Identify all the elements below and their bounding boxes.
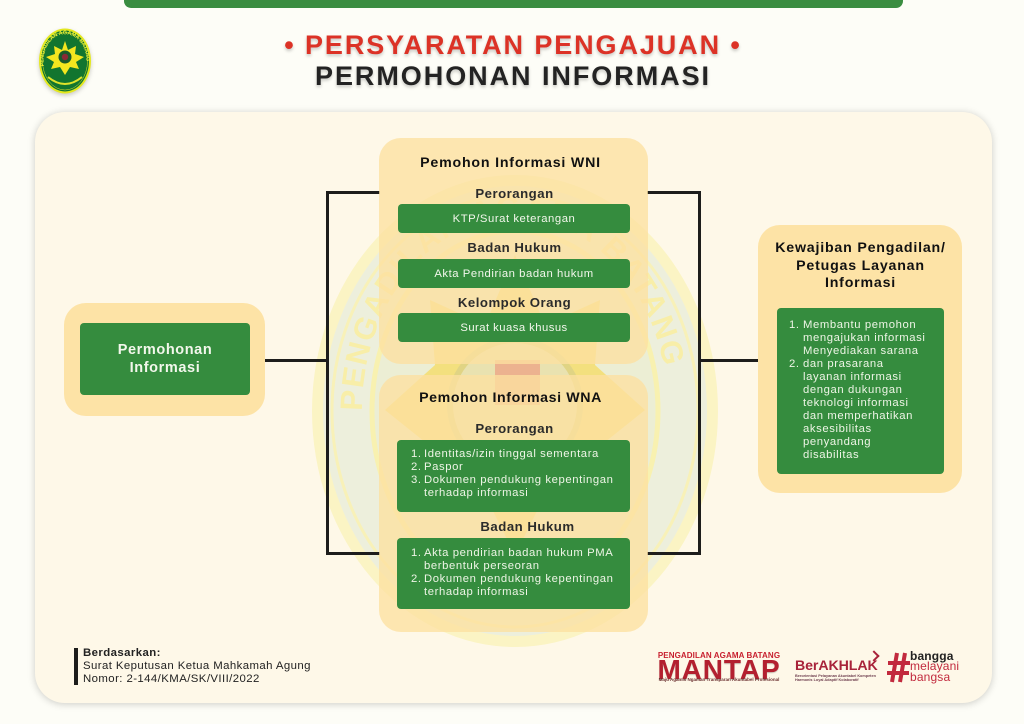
list box: 2. [789, 358, 800, 370]
logo: BerAKHLAK: Harmonis Loyal Adaptif Kolaboratif [795, 678, 859, 682]
list box Badan Hukum: terhadap informasi [424, 586, 528, 598]
green box with label: Informasi [130, 360, 200, 376]
label Perorangan: Perorangan [475, 186, 554, 201]
list box Perorangan [397, 440, 630, 512]
logo: MANTAP: MANTAP [657, 654, 781, 685]
panel: Kewajiban Pengadilan [758, 225, 962, 493]
panel: Permohonan Informasi [64, 303, 265, 416]
box KTP: KTP/Surat keterangan [453, 213, 575, 225]
label Perorangan: Perorangan [475, 421, 554, 436]
slogan text [910, 649, 959, 684]
logo: BerAKHLAK [795, 650, 880, 682]
legal basis note: Surat Keputusan Ketua Mahkamah Agung [83, 660, 311, 672]
label Badan Hukum: Badan Hukum [467, 240, 562, 255]
list box Perorangan: Dokumen pendukung kepentingan [424, 474, 614, 486]
title line 2: PERMOHONAN INFORMASI [315, 61, 711, 91]
slogan text: melayani [910, 659, 959, 673]
heading: Informasi [825, 275, 896, 291]
list box Badan Hukum [397, 538, 630, 609]
watermark emblem [312, 194, 718, 647]
title line 1: • PERSYARATAN PENGAJUAN • [284, 30, 742, 60]
list box Perorangan: Paspor [424, 461, 463, 473]
legal basis note: Berdasarkan: [83, 647, 161, 659]
list box: penyandang [803, 436, 871, 448]
logo: MANTAP: PENGADILAN AGAMA BATANG [658, 651, 780, 660]
list box: disabilitas [803, 449, 859, 461]
panel: Pemohon Informasi WNI [379, 138, 648, 364]
list box: aksesibilitas [803, 423, 872, 435]
list box Perorangan: 2. [411, 461, 422, 473]
logo: BerAKHLAK: Berorientasi Pelayanan Akuntabel Kompeten [795, 674, 876, 678]
main panel [35, 112, 992, 703]
list box: dan prasarana [803, 358, 884, 370]
panel content: WNA [397, 390, 630, 609]
heading [775, 240, 946, 291]
list box: teknologi informasi [803, 397, 909, 409]
legal basis note: Nomor: 2-144/KMA/SK/VIII/2022 [83, 673, 260, 685]
list box: Menyediakan sarana [803, 345, 919, 357]
green box with label [80, 323, 250, 395]
logo: bangga melayani bangsa [887, 649, 959, 684]
panel content: WNI [398, 155, 630, 342]
list box Perorangan: Identitas/izin tinggal sementara [424, 448, 599, 460]
slogan text: bangga [910, 649, 954, 663]
slogan text: bangsa [910, 670, 950, 684]
green box with label: Permohonan [118, 342, 212, 358]
box Akta: Akta Pendirian badan hukum [434, 268, 594, 280]
list box Perorangan: 3. [411, 474, 422, 486]
label Kelompok Orang: Kelompok Orang [458, 295, 571, 310]
list box: layanan informasi [803, 371, 902, 383]
box Akta [398, 259, 630, 288]
legal basis note [74, 647, 311, 685]
list box Badan Hukum: Akta pendirian badan hukum PMA [424, 547, 613, 559]
heading: Kewajiban Pengadilan/ [775, 240, 946, 256]
list box: dengan dukungan [803, 384, 902, 396]
logo: court emblem: PENGADILAN AGAMA BATANG [40, 30, 90, 66]
logo: MANTAP: Maju Agamis Ngaman Transparan Akuntabel Profesional [659, 677, 779, 682]
heading: Petugas Layanan [796, 258, 925, 274]
list box: Membantu pemohon [803, 319, 916, 331]
list box: mengajukan informasi [803, 332, 926, 344]
list box: dan memperhatikan [803, 410, 913, 422]
box Surat kuasa: Surat kuasa khusus [460, 322, 568, 334]
list box Badan Hukum: 1. [411, 547, 422, 559]
list box Badan Hukum: 2. [411, 573, 422, 585]
list box Perorangan: terhadap informasi [424, 487, 528, 499]
list box Perorangan: 1. [411, 448, 422, 460]
icon: hash [887, 652, 910, 682]
title [284, 30, 742, 91]
list box [777, 308, 944, 474]
list box Badan Hukum: berbentuk perseoran [424, 560, 540, 572]
box KTP [398, 204, 630, 233]
heading WNI: Pemohon Informasi WNI [420, 155, 601, 171]
logo: court emblem [37, 28, 93, 98]
heading WNA: Pemohon Informasi WNA [419, 390, 602, 406]
label Badan Hukum: Badan Hukum [480, 519, 575, 534]
box Surat kuasa [398, 313, 630, 342]
panel: Pemohon Informasi WNA [379, 375, 648, 632]
watermark emblem: PENGADILAN AGAMA BATANG [340, 197, 683, 409]
top green bar [124, 0, 903, 8]
list box: 1. [789, 319, 800, 331]
logo: BerAKHLAK: BerAKHLAK [795, 658, 878, 674]
list box Badan Hukum: Dokumen pendukung kepentingan [424, 573, 614, 585]
